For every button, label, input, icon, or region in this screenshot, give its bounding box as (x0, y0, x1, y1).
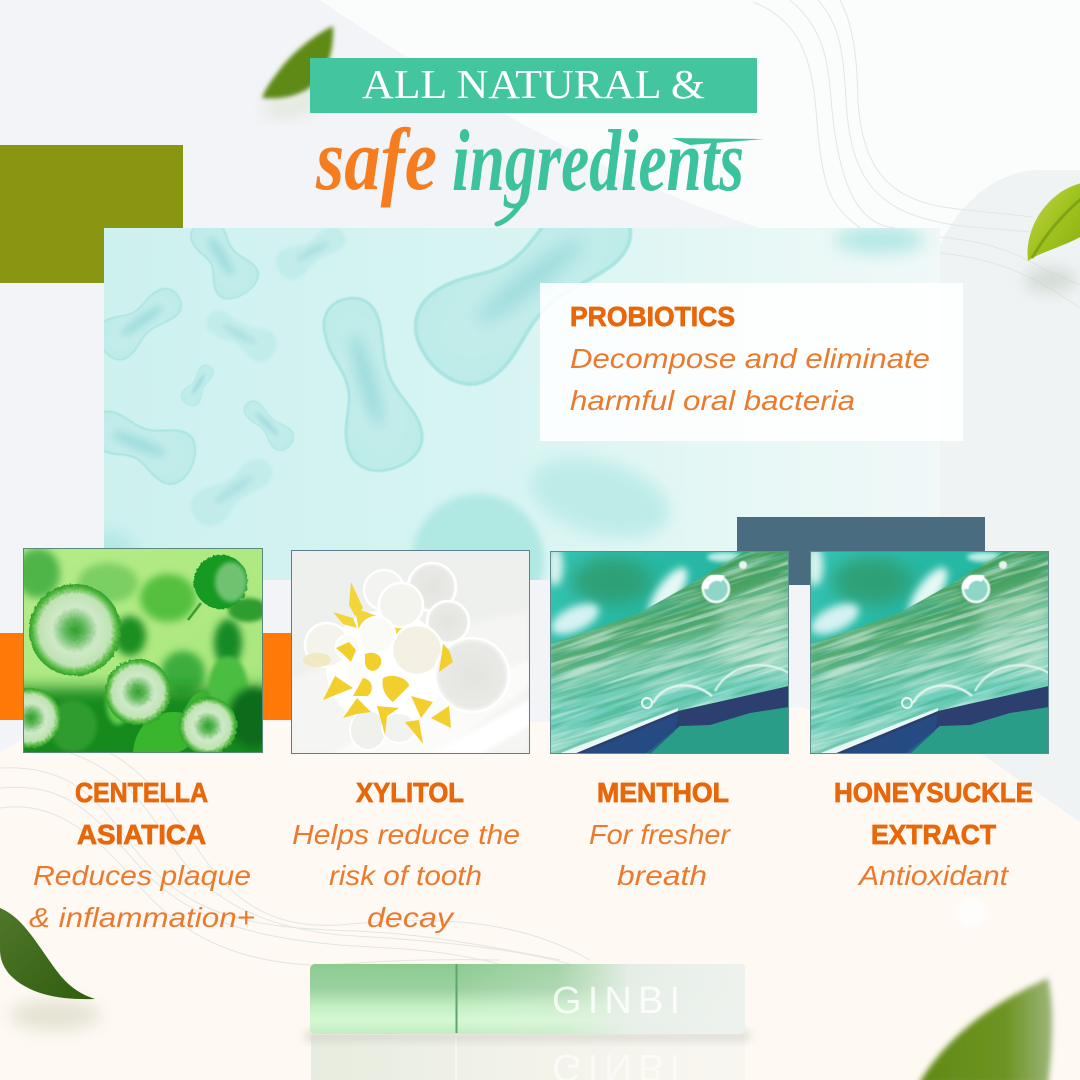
probiotics text card: PROBIOTICS (570, 301, 735, 332)
caption: centella asiatica: ASIATICA (77, 819, 206, 850)
caption: honeysuckle extract (834, 777, 1033, 891)
caption: menthol: For fresher (589, 819, 732, 850)
title banner: ALL NATURAL & (362, 61, 705, 107)
title banner (310, 58, 757, 113)
caption: menthol: breath (617, 860, 707, 891)
contour lines: lower left (0, 753, 640, 1000)
script title: safe (315, 112, 437, 209)
probiotics text card: harmful oral bacteria (570, 385, 855, 416)
image: centella asiatica (23, 548, 263, 753)
product tube: GINBI (552, 980, 680, 1022)
orange band (0, 633, 291, 720)
caption: centella asiatica (29, 777, 255, 933)
bottom-right blurred leaf (918, 978, 1052, 1080)
caption: honeysuckle extract: EXTRACT (871, 819, 996, 850)
probiotics text card: Decompose and eliminate (570, 343, 930, 374)
olive block (0, 145, 183, 283)
dark blue block (737, 517, 985, 585)
caption: xylitol: risk of tooth (329, 860, 482, 891)
caption: xylitol: XYLITOL (356, 777, 464, 808)
bottom-left leaf (0, 908, 100, 1031)
product tube (305, 964, 750, 1080)
image: xylitol (291, 550, 530, 754)
script title (315, 112, 764, 224)
image: honeysuckle extract (709, 437, 1080, 878)
caption: centella asiatica: Reduces plaque (33, 860, 251, 891)
script title: ingredients (452, 113, 744, 210)
panel: probiotics bacteria image (104, 228, 932, 580)
caption: xylitol: decay (367, 902, 455, 933)
soft bokeh circle (958, 899, 986, 927)
contour lines: top right (753, 0, 1080, 308)
caption: centella asiatica: & inflammation+ (29, 902, 255, 933)
caption: xylitol: Helps reduce the (292, 819, 520, 850)
caption: xylitol (292, 777, 520, 933)
image: menthol (449, 437, 916, 878)
right leaf (1024, 183, 1080, 292)
top-left blurred leaf (262, 26, 333, 109)
caption: honeysuckle extract: HONEYSUCKLE (834, 777, 1033, 808)
caption: menthol (589, 777, 732, 891)
probiotics text card (540, 283, 963, 441)
caption: centella asiatica: CENTELLA (75, 777, 208, 808)
caption: honeysuckle extract: Antioxidant (857, 860, 1009, 891)
caption: menthol: MENTHOL (597, 777, 729, 808)
